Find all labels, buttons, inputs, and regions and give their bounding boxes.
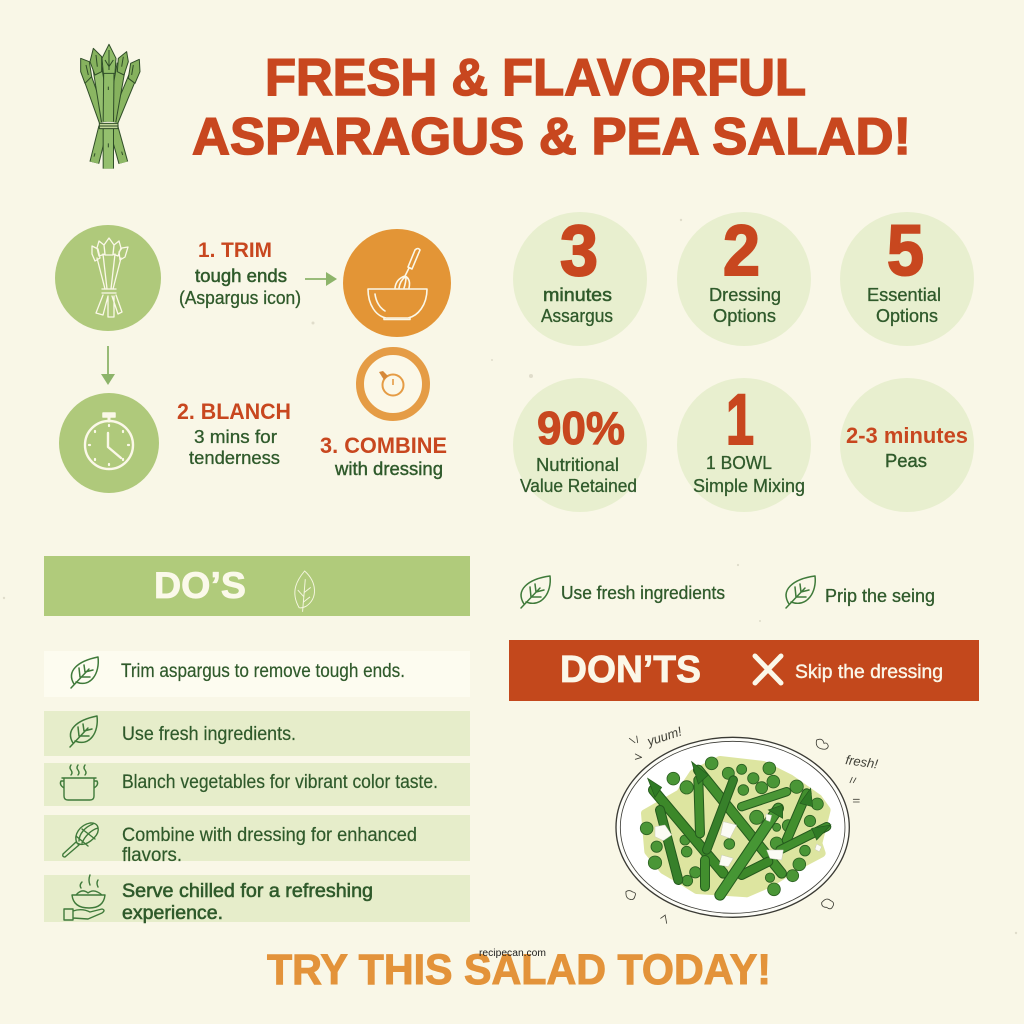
arrow: to combine — [305, 272, 337, 286]
stat: 5 essential options: Essential — [867, 285, 941, 305]
stat: 1 bowl — [677, 378, 811, 512]
panel: don'ts banner: DON’TS — [560, 649, 701, 691]
step 1 text: 1. TRIM — [198, 239, 272, 262]
title — [192, 49, 911, 166]
stat: 3 minutes — [513, 212, 647, 346]
stat: 3 minutes: Assargus — [541, 306, 613, 326]
stat: 90% nutritional value — [513, 378, 647, 512]
do item: combine: flavors. — [122, 845, 182, 866]
stat: 1 bowl: Simple Mixing — [693, 476, 805, 496]
stat: 3 minutes: 3 — [560, 212, 598, 291]
icon: asparagus bundle — [81, 44, 140, 169]
tip: prip the seing: Prip the seing — [825, 586, 935, 606]
do item: serve: Serve chilled for a refreshing — [122, 881, 373, 902]
do item: serve: experience. — [122, 903, 223, 924]
step 3 text — [320, 433, 447, 479]
title: ASPARAGUS & PEA SALAD! — [192, 108, 911, 166]
step 2 text: 3 mins for — [194, 427, 277, 447]
handwritten note: fresh: fresh! — [845, 752, 879, 772]
stat: 90% nutritional value: Value Retained — [520, 476, 637, 496]
panel: don'ts banner — [509, 640, 979, 701]
step 1 text — [179, 239, 301, 308]
tip: prip the seing — [786, 576, 935, 608]
stat: 1 bowl: 1 BOWL — [706, 453, 772, 473]
step 1: trim icon circle — [55, 225, 161, 331]
stat: 2-3 minutes peas: Peas — [885, 451, 927, 471]
stat: 2 dressing options: 2 — [723, 212, 760, 291]
stat: 2-3 minutes peas: 2-3 minutes — [846, 423, 968, 448]
step 2 text: 2. BLANCH — [177, 399, 291, 424]
stat: 5 essential options — [840, 212, 974, 346]
stat: 2-3 minutes peas — [840, 378, 974, 512]
watermark: recipecan.com — [479, 948, 546, 959]
step 3 text: 3. COMBINE — [320, 433, 447, 458]
step 2 text: tenderness — [189, 448, 280, 468]
stat: 5 essential options: 5 — [887, 212, 924, 291]
title: FRESH & FLAVORFUL — [265, 49, 806, 107]
panel: do's header: DO’S — [154, 565, 246, 606]
call to action: TRY THIS SALAD TODAY! — [267, 946, 771, 994]
panel: don'ts banner: Skip the dressing — [795, 662, 943, 683]
stat: 5 essential options: Options — [876, 306, 938, 326]
icon: orange timer ring — [360, 351, 426, 417]
stat: 3 minutes: minutes — [543, 285, 612, 305]
stat: 90% nutritional value: Nutritional — [536, 455, 619, 475]
arrow: to blanch — [101, 346, 115, 385]
do item: fresh — [44, 711, 470, 756]
step 2 text — [177, 399, 291, 468]
do item: trim: Trim aspargus to remove tough ends. — [121, 661, 405, 682]
do item: serve — [44, 875, 470, 924]
stat: 2 dressing options: Options — [713, 306, 776, 326]
illustration: salad plate — [616, 736, 859, 923]
step 3 text: with dressing — [334, 459, 443, 479]
do item: blanch: Blanch vegetables for vibrant color taste. — [122, 772, 438, 793]
do item: trim — [44, 651, 470, 697]
tip: use fresh ingredients — [521, 576, 725, 608]
do item: combine: Combine with dressing for enhanced — [122, 825, 417, 846]
tip: use fresh ingredients: Use fresh ingredients — [561, 583, 725, 603]
step 2: stopwatch icon circle — [59, 393, 159, 493]
stat: 2 dressing options — [677, 212, 811, 346]
step 3: bowl and whisk icon circle — [343, 229, 451, 337]
step 1 text: (Aspargus icon) — [179, 288, 301, 308]
do item: blanch — [44, 763, 470, 806]
stat: 1 bowl: 1 — [726, 381, 754, 460]
do item: combine — [44, 815, 470, 866]
stat: 2 dressing options: Dressing — [709, 285, 781, 305]
panel: do's header — [44, 556, 470, 616]
stat: 90% nutritional value: 90% — [537, 402, 625, 454]
step 1 text: tough ends — [195, 266, 287, 286]
do item: fresh: Use fresh ingredients. — [122, 724, 296, 745]
handwritten note: yum: yuum! — [644, 724, 684, 749]
